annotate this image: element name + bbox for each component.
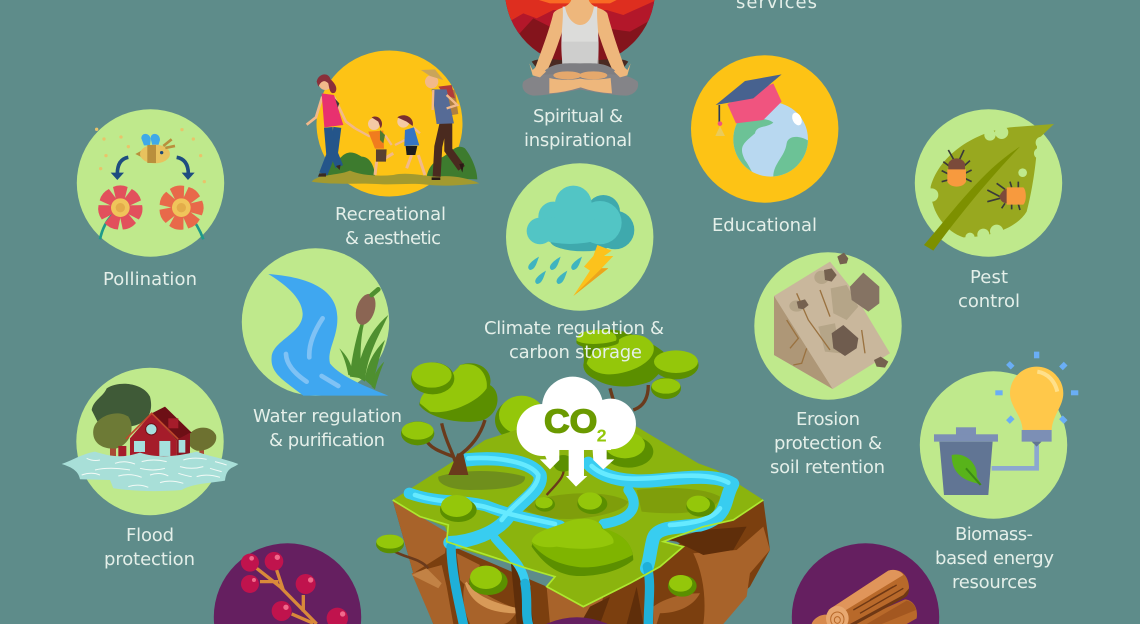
icon: green circle — [915, 109, 1062, 257]
icon: meditating person on red circle — [503, 0, 657, 96]
big central bush — [532, 519, 633, 576]
icon: purple circle — [214, 543, 361, 624]
icon: purple circle — [792, 543, 939, 624]
panel: flood protection — [62, 368, 238, 570]
panel: pest control — [915, 109, 1062, 312]
label: Erosion protection & soil retention: soil retention — [770, 457, 885, 478]
icon: storm cloud — [527, 186, 634, 296]
icon: eroding slope with boulders — [774, 253, 890, 389]
panel: biomass energy — [920, 352, 1078, 593]
tree: middle small — [547, 455, 573, 495]
icon: green circle — [506, 163, 653, 311]
icon: leaf with beetles — [924, 124, 1054, 251]
label: Pest control: Pest — [970, 267, 1008, 288]
icon: river and cattail — [268, 274, 388, 396]
panel: food berries — [214, 543, 361, 624]
label: Pollination: Pollination — [103, 269, 197, 290]
label: Erosion protection & soil retention — [770, 409, 885, 478]
CO2 cloud with arrows — [517, 377, 636, 487]
rivers — [409, 458, 733, 624]
icon: wooden logs — [812, 570, 917, 624]
label: Pest control: control — [958, 291, 1020, 312]
dark fields — [438, 471, 720, 519]
icon: green circle — [754, 252, 902, 400]
panel: erosion protection — [754, 252, 902, 478]
label: Climate regulation & carbon storage: carbon storage — [509, 342, 642, 363]
CO2 cloud with arrows: 2 — [597, 425, 607, 445]
label: Water regulation & purification: & purification — [269, 430, 385, 451]
panel: climate regulation — [506, 163, 653, 311]
tree: back right — [576, 329, 699, 410]
icon: flooded house — [62, 384, 238, 491]
label: Spiritual & inspirational: Spiritual & — [533, 106, 623, 127]
bush: back left — [495, 396, 545, 442]
panel: timber logs — [792, 543, 939, 624]
icon: bee and flowers — [95, 128, 206, 239]
icon: green circle — [242, 248, 389, 396]
tree: small left edge — [376, 535, 428, 568]
panel: educational — [691, 55, 838, 236]
label: CO2: CO — [544, 404, 597, 441]
label: Climate regulation & carbon storage: Climate regulation & — [484, 318, 664, 339]
icon: green circle — [77, 109, 224, 257]
label: Spiritual & inspirational — [524, 106, 632, 151]
label: Flood protection: protection — [104, 549, 195, 570]
icon: red berries on branch — [241, 552, 348, 624]
tree: front left — [401, 362, 498, 475]
label: Water regulation & purification — [253, 406, 402, 451]
icon: hiking family — [307, 69, 479, 186]
icon: graduation globe — [715, 74, 810, 178]
label: Biomass-based energy resources: Biomass- — [955, 524, 1033, 545]
label: Flood protection — [104, 525, 195, 570]
label: Biomass-based energy resources — [935, 524, 1054, 593]
icon: yellow circle — [316, 50, 462, 196]
icon: purple circle bottom centre — [503, 617, 651, 624]
label: Erosion protection & soil retention: Erosion — [796, 409, 860, 430]
panel: central island with CO2 — [376, 318, 770, 624]
icon: yellow circle — [691, 55, 838, 203]
label: Recreational & aesthetic: Recreational — [335, 204, 446, 225]
panel: spiritual and inspirational — [503, 0, 657, 151]
icon: green circle — [76, 368, 224, 515]
label: Biomass-based energy resources: resources — [952, 572, 1037, 593]
label: Recreational & aesthetic: & aesthetic — [345, 228, 441, 249]
icon: bio bin and light bulb — [934, 352, 1078, 495]
icon: green circle — [920, 371, 1067, 519]
label: Pest control — [958, 267, 1020, 312]
panel: pollination — [77, 109, 224, 290]
label: Recreational & aesthetic — [335, 204, 446, 249]
label: Climate regulation & carbon storage — [484, 318, 664, 363]
surface front edge — [393, 500, 763, 607]
label: Spiritual & inspirational: inspirational — [524, 130, 632, 151]
island surface — [393, 420, 763, 607]
label: Flood protection: Flood — [126, 525, 174, 546]
illustration: floating island — [376, 329, 770, 624]
label: Educational: Educational — [712, 215, 817, 236]
panel: recreational and aesthetic — [307, 50, 479, 249]
panel: water regulation — [242, 248, 402, 451]
label: Water regulation & purification: Water regulation — [253, 406, 402, 427]
rock body — [393, 500, 770, 624]
label: Biomass-based energy resources: based energy — [935, 548, 1054, 569]
label: Erosion protection & soil retention: protection & — [774, 433, 882, 454]
bushes — [440, 432, 715, 597]
